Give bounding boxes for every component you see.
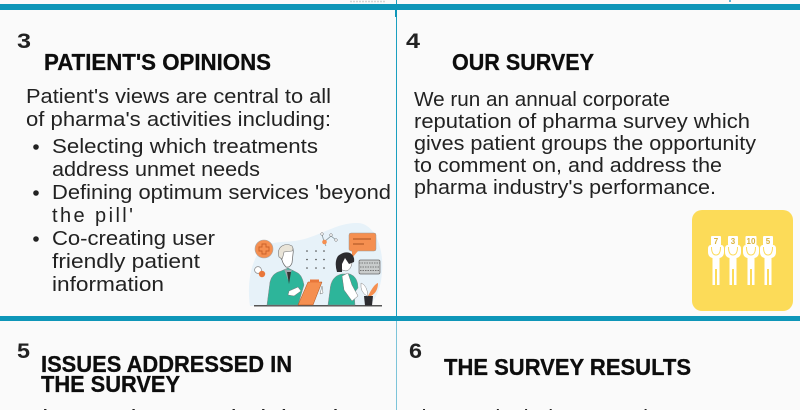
icon: people holding score cards: 5 (766, 237, 771, 246)
panel: patient's opinions (17, 30, 391, 306)
bullet list: Selecting which treatments (52, 136, 318, 158)
bullet list: the pill' (52, 205, 133, 227)
heading: patient's opinions: PATIENT'S OPINIONS (44, 49, 271, 75)
bullet list: Defining optimum services 'beyond (52, 182, 391, 204)
panel: our survey (406, 30, 793, 311)
panel number 6: 6 (409, 340, 422, 363)
illustration: doctor and patient (249, 223, 382, 306)
icon: people holding score cards (692, 210, 793, 311)
heading: the survey results: THE SURVEY RESULTS (444, 354, 691, 380)
heading: issues addressed (41, 351, 292, 397)
heading: issues addressed: THE SURVEY (41, 371, 180, 397)
survey description: pharma industry's performance. (414, 177, 716, 199)
intro text: of pharma's activities including: (26, 109, 331, 131)
panel number 4: 4 (406, 30, 420, 53)
panel: issues addressed in the survey (17, 340, 362, 410)
panel number 3: 3 (17, 30, 31, 53)
survey description: to comment on, and address the (414, 155, 722, 177)
bullet list (33, 136, 391, 296)
panel: the survey results (408, 340, 691, 410)
heading: issues addressed: ISSUES ADDRESSED IN (41, 351, 292, 377)
bullet list: address unmet needs (52, 159, 260, 181)
icon: people holding score cards: 3 (731, 237, 736, 246)
icon: people holding score cards: 10 (747, 237, 756, 246)
bullet list: information (52, 274, 164, 296)
bullet list: Co-creating user (52, 228, 215, 250)
icon: people holding score cards: 7 (714, 237, 719, 246)
panel number 5: 5 (17, 340, 30, 363)
heading: our survey: OUR SURVEY (452, 49, 594, 75)
intro text (26, 86, 331, 131)
survey description: reputation of pharma survey which (414, 111, 750, 133)
survey description: We run an annual corporate (414, 89, 670, 111)
survey description (414, 89, 756, 199)
intro text: Patient's views are central to all (26, 86, 331, 108)
bullet list: friendly patient (52, 251, 201, 273)
survey description: gives patient groups the opportunity (414, 133, 756, 155)
